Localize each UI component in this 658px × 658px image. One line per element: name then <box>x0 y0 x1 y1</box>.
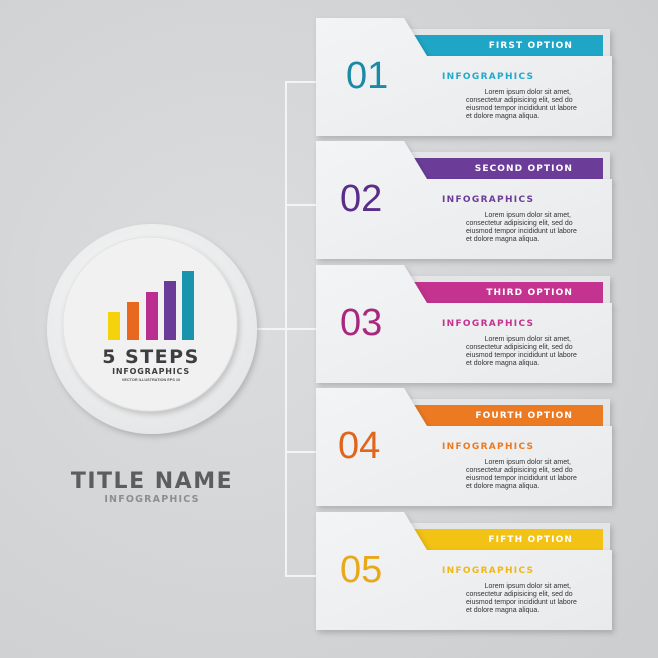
panel: option 1: 01 <box>346 55 388 97</box>
panel: option 3: consectetur adipisicing elit, sed do <box>466 344 573 351</box>
panel: option 1 <box>316 18 612 136</box>
circle title: INFOGRAPHICS <box>112 367 190 376</box>
panel: option 3: Lorem ipsum dolor sit amet, <box>485 336 571 343</box>
panel: option 1: consectetur adipisicing elit, sed do <box>466 97 573 104</box>
panel: option 5: eiusmod tempor incididunt ut labore <box>466 599 577 606</box>
panel: option 2: 02 <box>340 178 382 220</box>
title name: TITLE NAME <box>71 469 233 494</box>
circle title: VECTOR ILLUSTRATION EPS 10 <box>122 378 180 382</box>
panel: option 4: FOURTH OPTION <box>475 411 573 421</box>
bar chart icon <box>108 271 194 340</box>
panel: option 4: Lorem ipsum dolor sit amet, <box>485 459 571 466</box>
panel: option 2: eiusmod tempor incididunt ut labore <box>466 228 577 235</box>
panel: option 4: consectetur adipisicing elit, sed do <box>466 467 573 474</box>
panel: option 2: SECOND OPTION <box>475 164 573 174</box>
panel: option 1: eiusmod tempor incididunt ut labore <box>466 105 577 112</box>
panel: option 4 <box>316 388 612 506</box>
panel: option 2: consectetur adipisicing elit, sed do <box>466 220 573 227</box>
panel: option 5: consectetur adipisicing elit, sed do <box>466 591 573 598</box>
panel: option 5: INFOGRAPHICS <box>442 566 534 576</box>
panel: option 2: Lorem ipsum dolor sit amet, <box>485 212 571 219</box>
panel: option 5: 05 <box>340 549 382 591</box>
panel: option 3: eiusmod tempor incididunt ut labore <box>466 352 577 359</box>
panel: option 2 <box>316 141 612 259</box>
circle title <box>102 346 200 382</box>
panel: option 1: FIRST OPTION <box>489 41 573 51</box>
central circle <box>47 224 257 434</box>
panel: option 5: Lorem ipsum dolor sit amet, <box>485 583 571 590</box>
panel: option 4: eiusmod tempor incididunt ut labore <box>466 475 577 482</box>
panel: option 3 <box>316 265 612 383</box>
panel: option 3: THIRD OPTION <box>486 288 573 298</box>
panel: option 4: INFOGRAPHICS <box>442 442 534 452</box>
connector lines <box>255 82 316 576</box>
title name <box>71 469 233 505</box>
panel: option 5: FIFTH OPTION <box>488 535 573 545</box>
panel: option 5: et dolore magna aliqua. <box>466 607 539 614</box>
panel: option 1: Lorem ipsum dolor sit amet, <box>485 89 571 96</box>
panel: option 5 <box>316 512 612 630</box>
panel: option 4: et dolore magna aliqua. <box>466 483 539 490</box>
panel: option 3: 03 <box>340 302 382 344</box>
panel: option 4: 04 <box>338 425 380 467</box>
circle title: 5 STEPS <box>102 346 200 368</box>
panel: option 1: INFOGRAPHICS <box>442 72 534 82</box>
panel: option 3: et dolore magna aliqua. <box>466 360 539 367</box>
title name: INFOGRAPHICS <box>104 494 200 505</box>
panel: option 1: et dolore magna aliqua. <box>466 113 539 120</box>
panel: option 2: INFOGRAPHICS <box>442 195 534 205</box>
panel: option 3: INFOGRAPHICS <box>442 319 534 329</box>
panel: option 2: et dolore magna aliqua. <box>466 236 539 243</box>
